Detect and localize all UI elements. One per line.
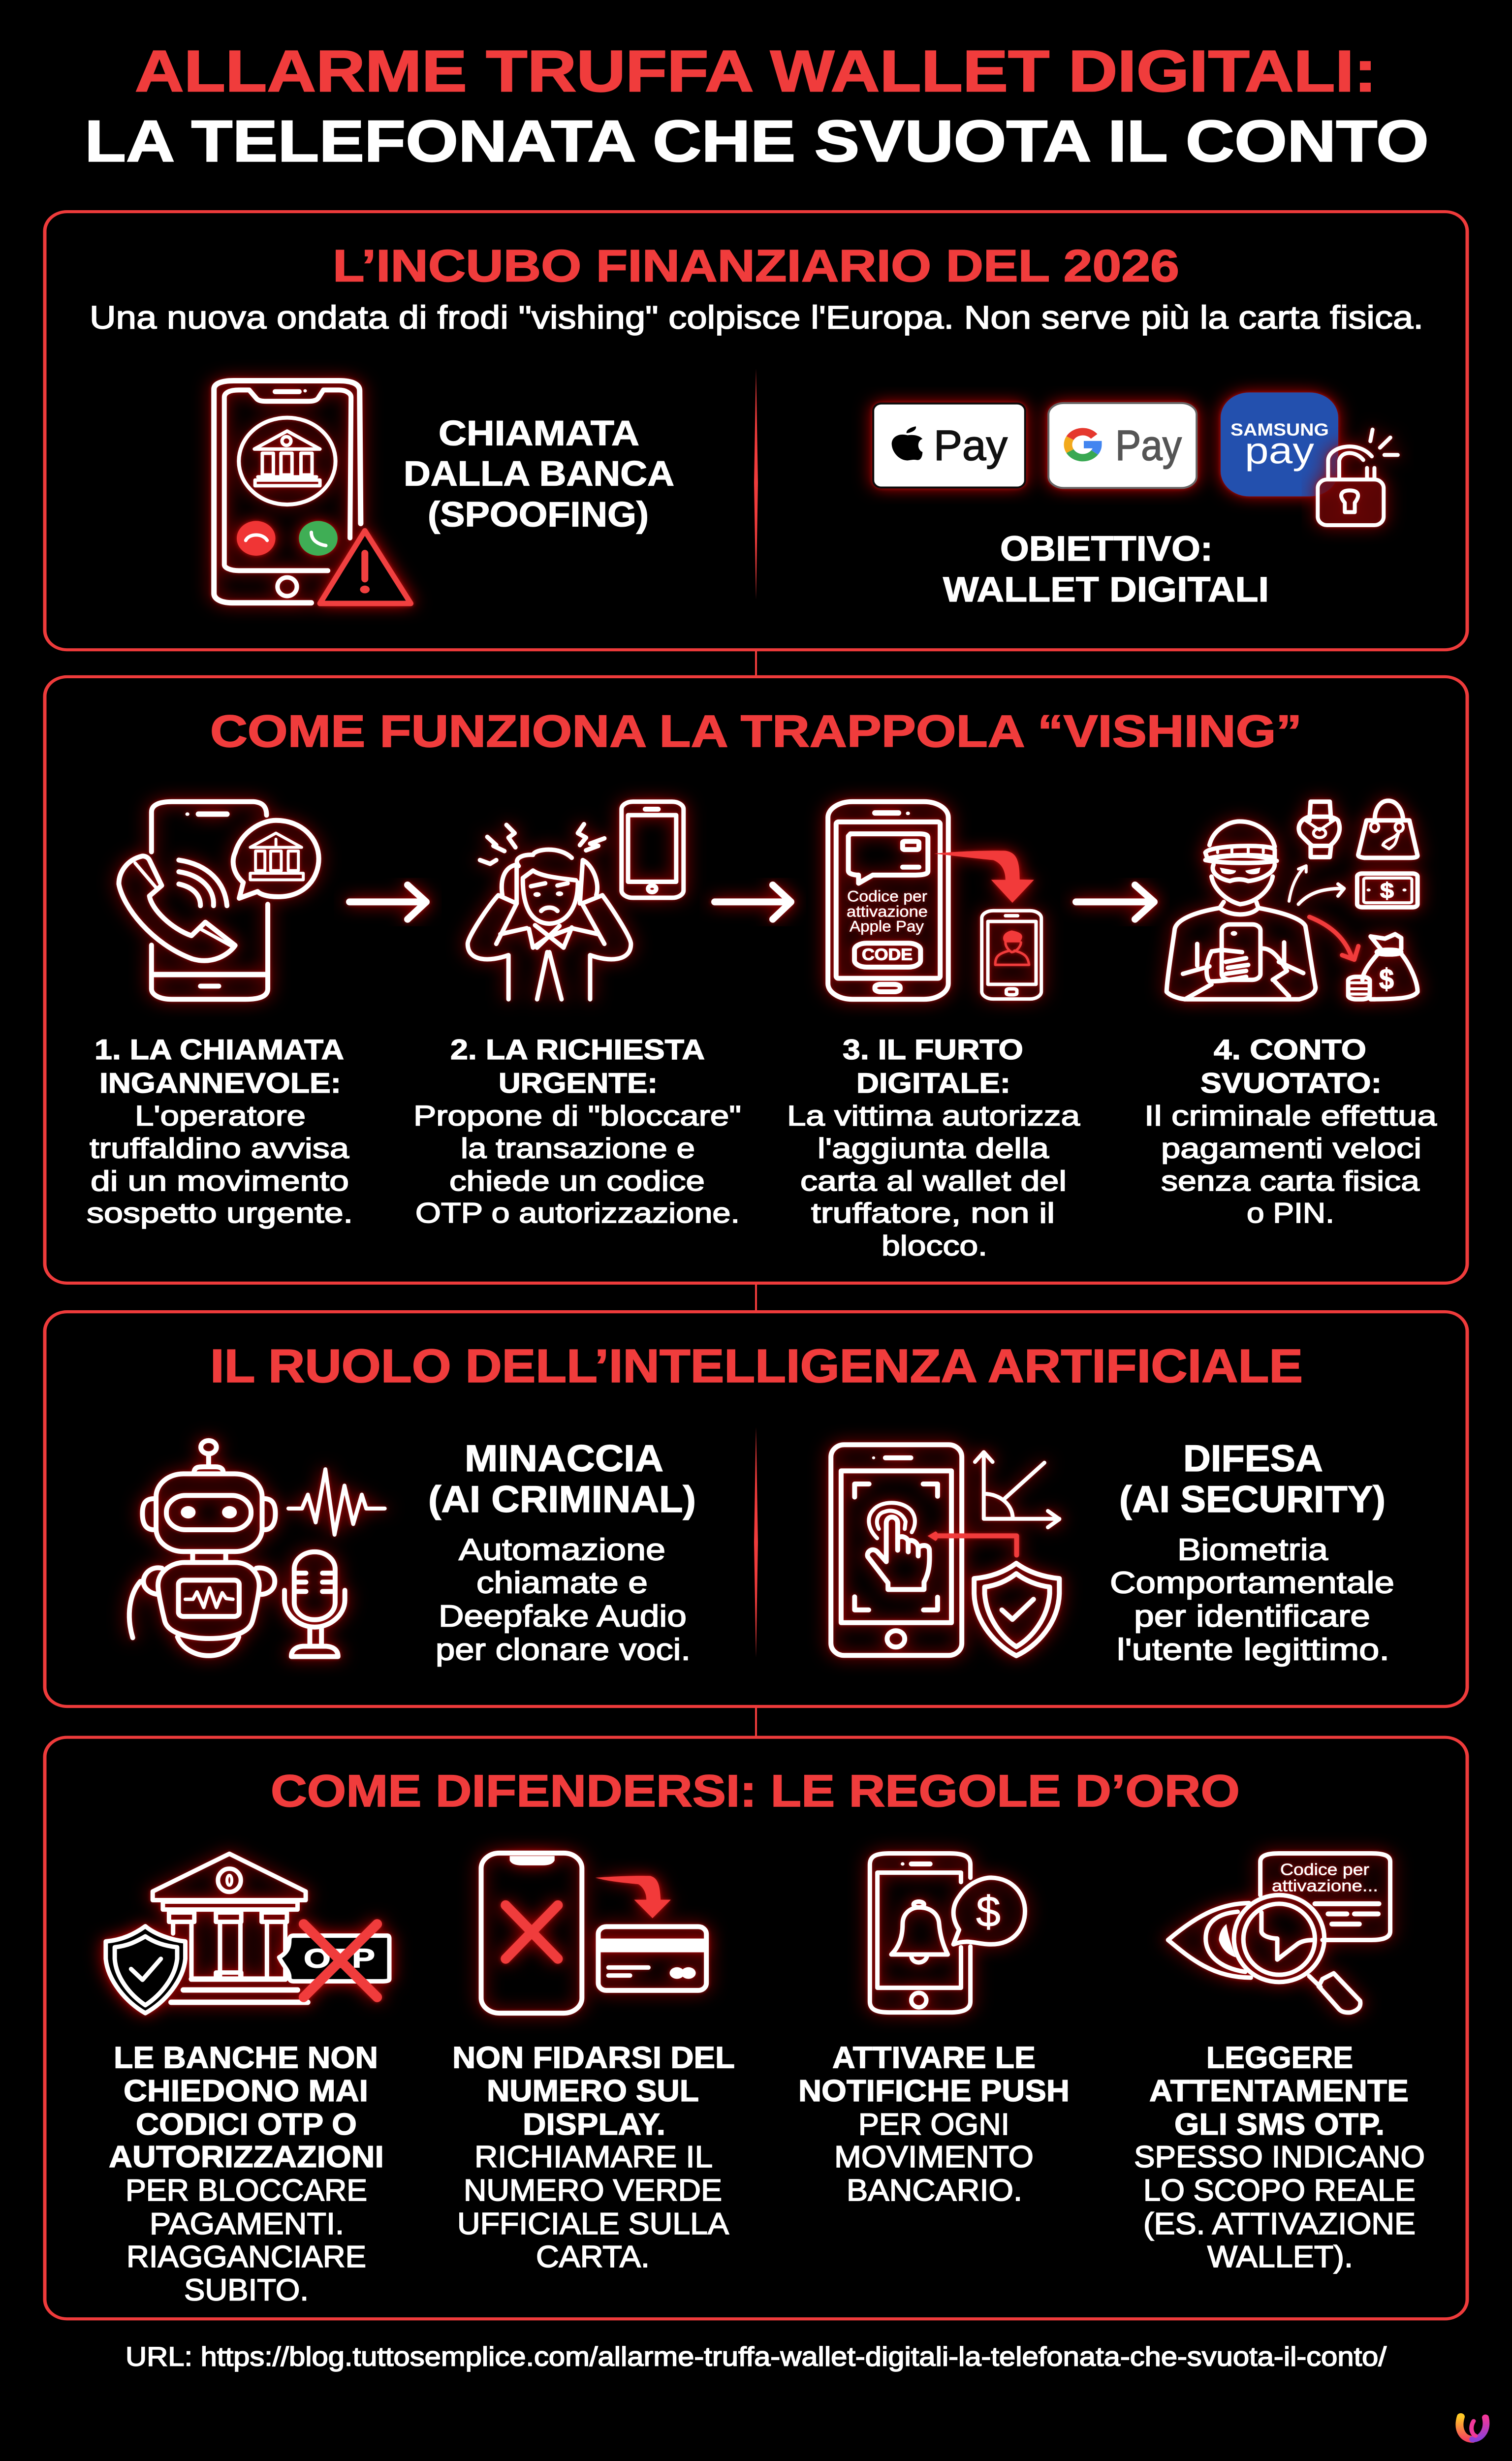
step 4 text: 4. CONTO [1214,1034,1366,1065]
panel: come difendersi [45,1737,1467,2319]
rule 2 text: RICHIAMARE IL [474,2140,713,2174]
icon: phone notification bell [870,1853,1025,2013]
rule 1 text [109,2041,384,2306]
rule 2 text: DISPLAY. [523,2107,665,2141]
rule 2 text: NON FIDARSI DEL [452,2041,735,2075]
icon: robot with audio wave and microphone [129,1441,385,1657]
icon: masked thief with loot: $ [1380,878,1394,903]
rule 4 text: WALLET). [1207,2240,1353,2273]
arrow: step 2 to 3 [715,885,791,919]
step 3 text: truffatore, non il [811,1197,1055,1229]
rule 1 text: PER BLOCCARE [126,2173,367,2207]
step 3 text: DIGITALE: [856,1067,1010,1099]
icon: eye, magnifier and sms: attivazione... [1272,1876,1378,1895]
icon: masked thief with loot: $ [1379,964,1394,995]
text: difesa [1110,1438,1394,1667]
icon: eye, magnifier and sms [1168,1853,1390,2013]
step 4 text: o PIN. [1247,1197,1334,1229]
icon: code request and wallet theft: CODE [862,946,913,964]
panel: come funziona la trappola vishing [45,677,1467,1283]
icon: apple pay card [873,404,1025,488]
panel: l'incubo finanziario [45,212,1467,650]
heading: intelligenza artificiale: IL RUOLO DELL’INTELLIGENZA ARTIFICIALE [210,1340,1303,1392]
source url: URL: https://blog.tuttosemplice.com/allarme-truffa-wallet-digitali-la-telefonata-che-svuota-il-conto/ [126,2342,1387,2372]
rule 1 text: CHIEDONO MAI [124,2074,368,2108]
step 2 text: URGENTE: [499,1067,658,1099]
label: chiamata dalla banca [404,414,674,534]
icon: masked thief with loot [1166,801,1418,999]
step 4 text: SVUOTATO: [1200,1067,1382,1099]
icon: code request and wallet theft: Codice per [847,887,927,905]
rule 2 text: UFFICIALE SULLA [457,2207,729,2240]
rule 3 text: BANCARIO. [847,2173,1022,2207]
rule 1 text: SUBITO. [184,2272,309,2306]
step 2 text: OTP o autorizzazione. [415,1197,740,1229]
label: obiettivo wallet digitali: OBIETTIVO: [1000,530,1213,568]
connector lines [755,650,757,1737]
icon: google pay card: Pay [1115,421,1182,469]
label: obiettivo wallet digitali [943,530,1269,609]
step 3 text [787,1034,1080,1262]
step 2 text: chiede un codice [449,1165,705,1197]
icon: google pay card [1048,403,1197,488]
rule 4 text: ATTENTAMENTE [1149,2074,1409,2108]
icon: bank, shield and crossed OTP: OTP [304,1944,375,1974]
rule 4 text: GLI SMS OTP. [1174,2107,1385,2141]
icon: stressed person [468,802,684,999]
step 3 text: l'aggiunta della [818,1132,1049,1164]
text: difesa: Comportamentale [1110,1565,1394,1600]
title: ALLARME TRUFFA WALLET DIGITALI: [135,38,1377,104]
icon: samsung pay card [1221,392,1338,496]
text: minaccia: per clonare voci. [436,1632,691,1667]
step 2 text: la transazione e [461,1132,695,1164]
icon: phone with X and card [481,1853,706,2013]
icon: samsung pay card: pay [1245,430,1314,472]
text: minaccia [428,1438,696,1667]
step 4 text [1144,1034,1437,1229]
icon: open padlock [1318,430,1398,525]
label: chiamata dalla banca: (SPOOFING) [428,495,649,534]
icon: phone call from bank [214,380,411,603]
rule 2 text: NUMERO SUL [487,2074,699,2108]
subtitle: Una nuova ondata di frodi "vishing" colpisce l'Europa. Non serve più la carta fisica. [90,299,1423,336]
icon: code request and wallet theft: attivazione [847,903,928,920]
title [85,38,1429,174]
step 2 text [413,1034,741,1229]
rule 4 text: (ES. ATTIVAZIONE [1143,2207,1416,2240]
label: obiettivo wallet digitali: WALLET DIGITALI [943,570,1269,609]
rule 1 text: AUTORIZZAZIONI [109,2140,384,2174]
arrow: step 1 to 2 [349,885,426,919]
text: minaccia: (AI CRIMINAL) [428,1479,696,1520]
icon: code request and wallet theft [828,802,1041,999]
step 3 text: blocco. [882,1230,987,1262]
text: difesa: Biometria [1177,1532,1328,1566]
step 3 text: 3. IL FURTO [843,1034,1023,1065]
icon: bank, shield and crossed OTP [106,1854,389,2013]
step 1 text: sospetto urgente. [87,1197,353,1229]
step 2 text: 2. LA RICHIESTA [450,1034,705,1065]
icon: phone call with bank bubble [119,802,319,999]
step 1 text: INGANNEVOLE: [99,1067,341,1099]
divider [754,1427,758,1657]
icon: biometric phone, axes and shield [831,1445,1059,1656]
logo [1459,2417,1486,2439]
text: minaccia: Deepfake Audio [439,1599,687,1633]
icon: samsung pay card: SAMSUNG [1230,420,1329,439]
rule 3 text: MOVIMENTO [834,2140,1034,2174]
rule 3 text: NOTIFICHE PUSH [798,2074,1070,2108]
rule 3 text: PER OGNI [858,2107,1009,2141]
step 4 text: pagamenti veloci [1161,1132,1421,1164]
rule 1 text: RIAGGANCIARE [126,2240,366,2273]
step 1 text [87,1034,353,1229]
step 1 text: di un movimento [91,1165,349,1197]
heading: trappola vishing: COME FUNZIONA LA TRAPPOLA “VISHING” [210,706,1302,757]
text: difesa: DIFESA [1183,1438,1323,1480]
text: difesa: per identificare [1134,1599,1370,1633]
divider [754,369,758,599]
text: difesa: (AI SECURITY) [1119,1479,1386,1520]
step 2 text: Propone di "bloccare" [413,1100,741,1131]
icon: code request and wallet theft: Apple Pay [850,917,924,935]
rule 4 text: LEGGERE [1206,2041,1353,2075]
text: difesa: l'utente legittimo. [1117,1632,1389,1667]
step 4 text: senza carta fisica [1161,1165,1420,1197]
rule 2 text [452,2041,735,2273]
rule 4 text [1134,2041,1425,2273]
icon: phone notification bell: $ [976,1887,1001,1936]
icon: apple pay card: Pay [934,421,1008,469]
icon: eye, magnifier and sms: Codice per [1280,1861,1369,1879]
heading: regole d'oro: COME DIFENDERSI: LE REGOLE D’ORO [271,1766,1240,1816]
text: minaccia: MINACCIA [465,1438,663,1480]
label: chiamata dalla banca: CHIAMATA [439,414,639,453]
step 3 text: La vittima autorizza [787,1100,1080,1131]
label: chiamata dalla banca: DALLA BANCA [404,454,674,493]
title: LA TELEFONATA CHE SVUOTA IL CONTO [85,108,1429,174]
panel: ruolo dell'intelligenza artificiale [45,1312,1467,1706]
step 1 text: 1. LA CHIAMATA [94,1034,344,1065]
rule 3 text [798,2041,1070,2207]
rule 2 text: CARTA. [536,2240,650,2273]
step 4 text: Il criminale effettua [1144,1100,1437,1131]
text: minaccia: Automazione [459,1532,665,1566]
arrow: step 3 to 4 [1076,885,1154,919]
rule 4 text: LO SCOPO REALE [1143,2173,1416,2207]
rule 1 text: CODICI OTP O [136,2107,357,2141]
text: minaccia: chiamate e [476,1565,648,1600]
rule 4 text: SPESSO INDICANO [1134,2140,1425,2174]
heading: incubo finanziario: L’INCUBO FINANZIARIO DEL 2026 [333,240,1179,291]
rule 2 text: NUMERO VERDE [464,2173,722,2207]
step 1 text: L'operatore [135,1100,306,1131]
step 3 text: carta al wallet del [800,1165,1067,1197]
step 1 text: truffaldino avvisa [90,1132,349,1164]
rule 3 text: ATTIVARE LE [832,2041,1036,2075]
rule 1 text: LE BANCHE NON [114,2041,378,2075]
rule 1 text: PAGAMENTI. [150,2207,344,2240]
